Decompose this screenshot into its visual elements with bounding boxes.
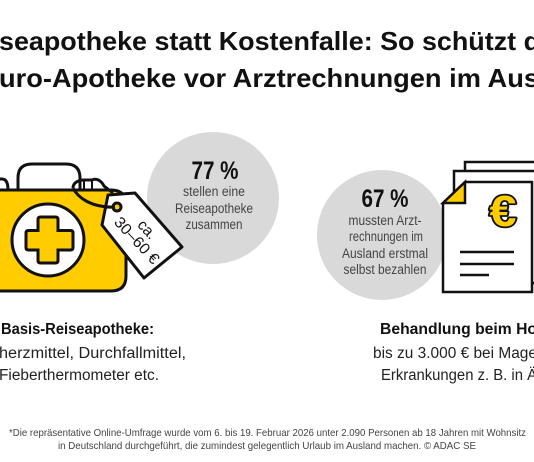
title	[0, 26, 534, 93]
icon: price tag: ca.	[134, 217, 160, 243]
icon: first aid kit	[0, 164, 126, 291]
title: seapotheke statt Kostenfalle: So schützt d	[0, 26, 534, 56]
panel: first aid kit statistic	[0, 132, 279, 291]
text: Behandlung beim Hausarzt	[373, 321, 534, 384]
text: mussten Arztrechnungen im Ausland erstmal selbst bezahlen: Ausland erstmal	[342, 246, 428, 261]
footnote	[9, 427, 526, 452]
footnote: in Deutschland durchgeführt, die zumindest gelegentlich Urlaub im Ausland machen. © ADAC SE	[58, 440, 476, 452]
title: uro-Apotheke vor Arztrechnungen im Aus	[0, 63, 534, 93]
text: Basis-Reiseapotheke: Basis-Reiseapotheke:	[1, 321, 154, 338]
text: mussten Arztrechnungen im Ausland erstmal selbst bezahlen: mussten Arzt-	[348, 213, 422, 228]
statistic: 77 %: 77 %	[192, 157, 238, 185]
text: Behandlung beim Hausarzt: bis zu 3.000 € bei Mage	[373, 345, 534, 362]
text: mussten Arztrechnungen im Ausland erstmal selbst bezahlen	[342, 213, 428, 277]
text: stellen eine Reiseapotheke zusammen	[175, 184, 253, 232]
text: stellen eine Reiseapotheke zusammen: Reiseapotheke	[175, 201, 253, 216]
text: Behandlung beim Hausarzt: Behandlung beim Ho	[380, 321, 534, 338]
statistic: 67 %: 67 %	[362, 185, 408, 213]
text: mussten Arztrechnungen im Ausland erstmal selbst bezahlen: selbst bezahlen	[344, 262, 426, 277]
text: stellen eine Reiseapotheke zusammen: stellen eine	[183, 184, 245, 199]
icon: invoice documents	[443, 162, 534, 292]
grey circle: 67 percent	[317, 170, 447, 300]
icon: price tag	[73, 179, 182, 278]
icon: invoice documents: €	[490, 187, 516, 236]
text: Basis-Reiseapotheke: herzmittel, Durchfallmittel,	[0, 345, 186, 362]
text: stellen eine Reiseapotheke zusammen: zusammen	[186, 217, 242, 232]
grey circle: 77 percent	[147, 132, 279, 264]
text: mussten Arztrechnungen im Ausland erstmal selbst bezahlen: rechnungen im	[349, 229, 423, 244]
text: Basis-Reiseapotheke	[0, 321, 186, 384]
icon: price tag: 30–60 €	[110, 214, 163, 268]
text: Basis-Reiseapotheke: Fieberthermometer etc.	[0, 367, 159, 384]
panel: invoice statistic	[317, 162, 534, 300]
